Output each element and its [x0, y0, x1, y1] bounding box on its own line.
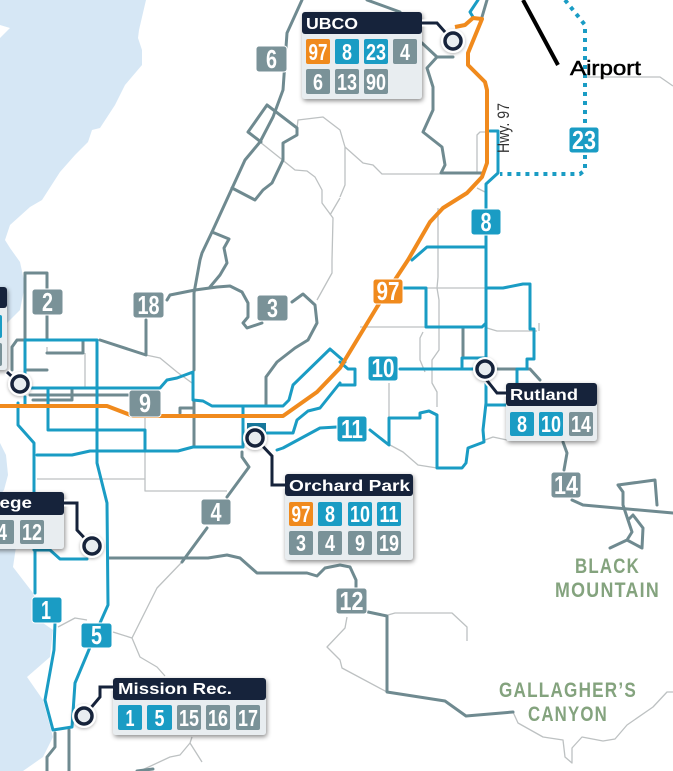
- badge: 2: 2: [42, 287, 53, 317]
- area label: Black Mountain: [555, 555, 660, 602]
- badge: 2: [32, 287, 63, 317]
- badge: 4: 4: [210, 497, 222, 527]
- station label: UBCO: 90: [366, 69, 386, 95]
- station label: UBCO: UBCO: [306, 16, 358, 33]
- badge: 3: [257, 293, 288, 323]
- badge: 5: 5: [91, 620, 102, 650]
- badge: 9: [129, 388, 161, 418]
- badge: 23: 23: [572, 125, 596, 155]
- station label: UBCO: [302, 12, 465, 99]
- station label: College: 12: [22, 519, 42, 545]
- badge: 5: [81, 620, 112, 650]
- lake: upper: [0, 0, 146, 330]
- station label: Orchard Park: 10: [350, 501, 370, 527]
- station label: Orchard Park: 19: [379, 530, 399, 556]
- badge: 18: 18: [138, 290, 160, 320]
- station label: College: [0, 492, 104, 558]
- airport pointer: [523, 0, 558, 65]
- station label: UBCO: 23: [366, 39, 386, 65]
- area label: Gallagher's Canyon: GALLAGHER’S: [499, 679, 637, 702]
- badge: 1: [32, 595, 62, 625]
- badge: 10: 10: [372, 353, 394, 383]
- badge: 3: 3: [267, 293, 278, 323]
- badge: 97: 97: [376, 276, 400, 306]
- station label: Mission Rec.: 17: [238, 705, 258, 731]
- station label: UBCO: 4: [400, 39, 410, 65]
- badge: 12: 12: [340, 586, 364, 616]
- station label: Mission Rec.: 16: [208, 705, 228, 731]
- highway label: Hwy. 97: [494, 103, 513, 153]
- station label: Mission Rec.: 15: [179, 705, 199, 731]
- station label: UBCO: 97: [308, 39, 328, 65]
- lake: lower: [0, 540, 53, 771]
- badge: 8: [471, 207, 501, 237]
- badge: 9: 9: [139, 388, 151, 418]
- badge: 14: 14: [554, 470, 578, 500]
- badge: 1: 1: [41, 595, 51, 625]
- station label: Rutland: 10: [541, 411, 561, 437]
- station label: downtown (cropped): [0, 287, 32, 396]
- station label: Orchard Park: 97: [292, 501, 310, 527]
- station label: Rutland: 8: [517, 411, 527, 437]
- station label: Orchard Park: 11: [380, 501, 399, 527]
- route 23 dotted line: [500, 0, 585, 174]
- station label: Orchard Park: 8: [325, 501, 335, 527]
- badge: 11: 11: [341, 414, 363, 444]
- badge: 8: 8: [480, 207, 492, 237]
- station label: Rutland: Rutland: [510, 387, 578, 404]
- airport label: Airport: [570, 58, 642, 80]
- station label: Orchard Park: 9: [355, 530, 365, 556]
- station label: UBCO: 6: [313, 69, 323, 95]
- routes: blue frequent routes: [18, 0, 534, 730]
- station label: UBCO: 8: [342, 39, 352, 65]
- station label: Mission Rec.: 5: [154, 705, 165, 731]
- area label: Gallagher's Canyon: CANYON: [528, 703, 608, 726]
- badge: 6: 6: [266, 44, 277, 74]
- station label: Mission Rec.: [72, 678, 266, 735]
- station label: Orchard Park: [243, 426, 413, 560]
- area label: Gallagher's Canyon: [499, 679, 637, 726]
- station label: Rutland: [473, 357, 597, 441]
- station label: Orchard Park: 4: [325, 530, 335, 556]
- station label: Orchard Park: 3: [296, 530, 306, 556]
- badge: 4: [201, 497, 231, 527]
- station label: Mission Rec.: 1: [126, 705, 135, 731]
- route 97 highway line: [0, 18, 487, 416]
- station label: UBCO: 13: [337, 69, 357, 95]
- station label: Orchard Park: Orchard Park: [289, 478, 410, 495]
- lake: middle: [0, 443, 8, 495]
- badge: 6: [256, 44, 287, 74]
- area label: Black Mountain: BLACK: [575, 555, 640, 578]
- station label: Rutland: 14: [571, 411, 591, 437]
- station label: Mission Rec.: Mission Rec.: [118, 681, 232, 698]
